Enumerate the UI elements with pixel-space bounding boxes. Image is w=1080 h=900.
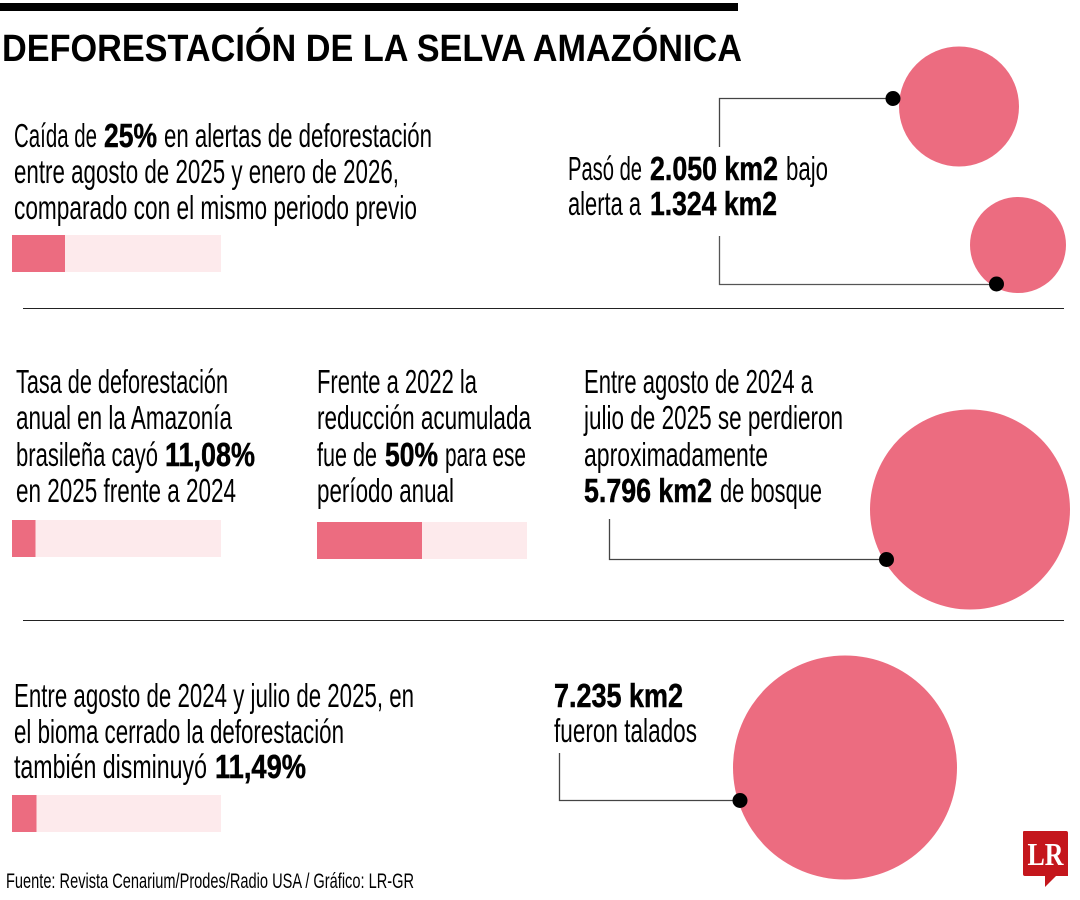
text block: closed biome bbox=[14, 677, 414, 785]
text block: cumulative reduction: 50% bbox=[385, 436, 438, 473]
text block: alerts drop: 25% bbox=[104, 117, 157, 154]
text block: cumulative reduction: para ese bbox=[445, 436, 526, 473]
text block: closed biome: el bioma cerrado la deforestación bbox=[14, 713, 344, 750]
text block: closed biome: Entre agosto de 2024 y julio de 2025, en bbox=[14, 677, 414, 714]
text block: area change: Pasó de bbox=[568, 150, 642, 187]
panel: closed biome 11,49% bbox=[12, 677, 414, 832]
connector: upper circle bbox=[720, 91, 900, 147]
circle: 7.235 km2 bbox=[733, 656, 957, 880]
text block: forest lost bbox=[583, 363, 843, 509]
text block: forest lost: de bosque bbox=[720, 472, 822, 509]
text block: annual rate: Tasa de deforestación bbox=[16, 363, 228, 400]
text block: felled area bbox=[554, 677, 697, 749]
text block: alerts drop bbox=[14, 117, 432, 226]
panel: felled 7.235 km2 bbox=[554, 656, 957, 880]
panel: forest lost 5.796 km2 bbox=[583, 363, 1070, 610]
text block: closed biome: también disminuyó bbox=[14, 748, 207, 785]
circle: 1.324 km2 bbox=[970, 197, 1066, 293]
text block: cumulative reduction: Frente a 2022 la bbox=[317, 363, 477, 400]
top bar bbox=[0, 3, 738, 11]
text block: annual rate bbox=[16, 363, 255, 509]
connector: 7.235 km2 bbox=[560, 753, 748, 808]
circle: 5.796 km2 bbox=[870, 410, 1070, 610]
bar: 11,08% bbox=[12, 520, 221, 557]
text block: felled area: 7.235 km2 bbox=[554, 677, 683, 714]
text block: area change bbox=[568, 150, 828, 222]
panel: alerts drop 25% bbox=[12, 117, 432, 272]
text block: alerts drop: en alertas de deforestación bbox=[164, 117, 432, 154]
text block: area change: 1.324 km2 bbox=[650, 185, 777, 222]
text block: felled area: fueron talados bbox=[554, 712, 697, 749]
source note: Fuente: Revista Cenarium/Prodes/Radio USA / Gráfico: LR-GR bbox=[6, 870, 414, 893]
text block: cumulative reduction bbox=[317, 363, 531, 509]
text block: cumulative reduction: período anual bbox=[317, 472, 454, 509]
text block: alerts drop: entre agosto de 2025 y enero de 2026, bbox=[14, 153, 399, 190]
text block: annual rate: 11,08% bbox=[165, 436, 255, 473]
text block: area change: 2.050 km2 bbox=[650, 150, 778, 187]
bar: 11,49% bbox=[12, 795, 221, 832]
text block: closed biome: 11,49% bbox=[215, 748, 306, 785]
connector: lower circle bbox=[720, 236, 1004, 292]
title: DEFORESTACIÓN DE LA SELVA AMAZÓNICA bbox=[2, 26, 742, 70]
panel: cumulative 50% bbox=[317, 363, 531, 559]
text block: annual rate: brasileña cayó bbox=[16, 436, 158, 473]
connector: 5.796 km2 bbox=[610, 519, 894, 567]
text block: forest lost: aproximadamente bbox=[584, 436, 768, 473]
text block: annual rate: en 2025 frente a 2024 bbox=[16, 472, 236, 509]
circle: 2.050 km2 bbox=[899, 46, 1019, 166]
panel: annual rate 11,08% bbox=[12, 363, 255, 557]
text block: area change: alerta a bbox=[568, 185, 641, 222]
text block: forest lost: julio de 2025 se perdieron bbox=[583, 399, 843, 436]
text block: cumulative reduction: reducción acumulada bbox=[317, 399, 531, 436]
bar: 50% bbox=[317, 522, 527, 559]
text block: annual rate: anual en la Amazonía bbox=[16, 399, 232, 436]
text block: alerts drop: comparado con el mismo periodo previo bbox=[14, 189, 417, 226]
text block: cumulative reduction: fue de bbox=[317, 436, 377, 473]
icon: LR logo bbox=[1023, 831, 1068, 887]
bar: 25% bbox=[12, 235, 221, 272]
text block: forest lost: Entre agosto de 2024 a bbox=[584, 363, 813, 400]
icon: LR logo: LR bbox=[1028, 836, 1064, 872]
text block: area change: bajo bbox=[786, 150, 828, 187]
text block: alerts drop: Caída de bbox=[14, 117, 97, 154]
text block: forest lost: 5.796 km2 bbox=[584, 472, 712, 509]
panel: alert area comparison bbox=[568, 46, 1066, 293]
